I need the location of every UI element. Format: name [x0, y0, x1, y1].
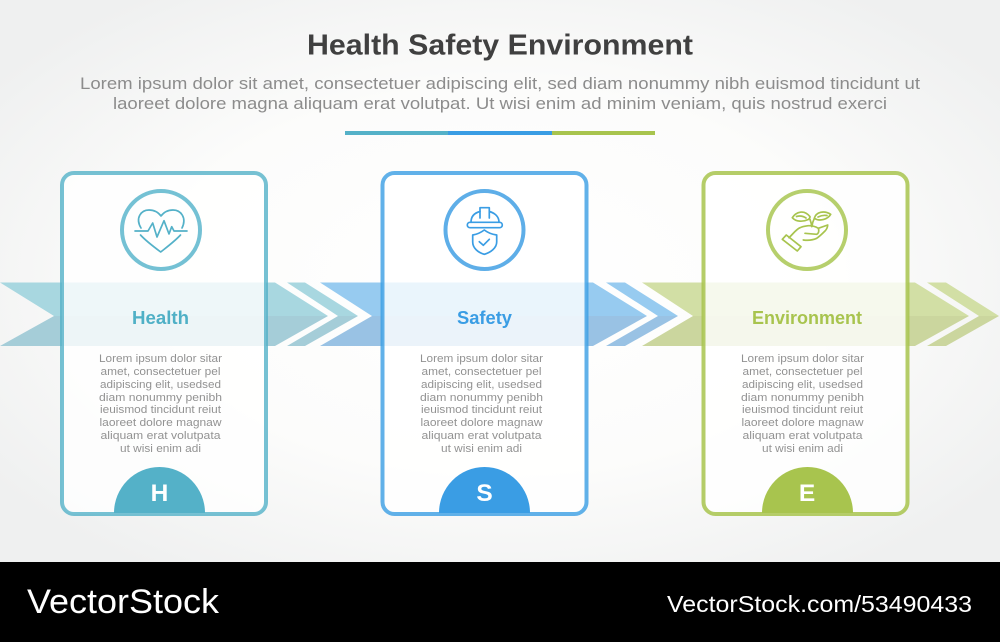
body text: ieuismod tincidunt reiut: [742, 404, 863, 416]
icon: hard hat and shield: [446, 191, 524, 269]
intro text: laoreet dolore magna aliquam erat volutpat. Ut wisi enim ad minim veniam, quis nostrud exerci: [113, 94, 887, 113]
arrow: health: [0, 282, 358, 346]
body text: aliquam erat volutpata: [422, 430, 542, 442]
footer bar: [0, 562, 1000, 642]
body text: ieuismod tincidunt reiut: [421, 404, 542, 416]
body text: Lorem ipsum dolor sitar: [741, 353, 864, 365]
card frame: [62, 173, 266, 514]
panel: safety: [382, 173, 586, 514]
panel: health: [62, 173, 266, 514]
body text: aliquam erat volutpata: [100, 430, 221, 442]
body text: diam nonummy penibh: [99, 392, 222, 404]
icon: hand holding seedling: [768, 191, 846, 269]
heading: Environment: [752, 308, 862, 328]
body text: aliquam erat volutpata: [742, 430, 863, 442]
body text: laoreet dolore magnaw: [420, 417, 543, 429]
tri-colour divider: [345, 131, 655, 135]
body text: diam nonummy penibh: [741, 392, 864, 404]
body text: [99, 353, 222, 455]
body text: ut wisi enim adi: [762, 443, 843, 455]
icon: heart with pulse: [122, 191, 200, 269]
heading: Safety: [457, 308, 512, 328]
body text: diam nonummy penibh: [420, 392, 543, 404]
letter badge: E: [762, 467, 853, 513]
body text: adipiscing elit, usedsed: [421, 379, 542, 391]
card frame: [704, 173, 908, 514]
body text: amet, consectetuer pel: [100, 366, 220, 378]
body text: Lorem ipsum dolor sitar: [420, 353, 543, 365]
body text: laoreet dolore magnaw: [742, 417, 864, 429]
body text: [420, 353, 543, 455]
body text: amet, consectetuer pel: [422, 366, 542, 378]
body text: ut wisi enim adi: [120, 443, 201, 455]
body text: [741, 353, 864, 455]
body text: Lorem ipsum dolor sitar: [99, 353, 222, 365]
title: Health Safety Environment: [307, 30, 693, 62]
panel: environment: [704, 173, 908, 514]
intro text: [80, 74, 920, 113]
footer logo: VectorStock: [27, 583, 220, 621]
card frame: [382, 173, 586, 514]
body text: laoreet dolore magnaw: [100, 417, 222, 429]
arrow band: [0, 282, 999, 346]
letter badge: H: H: [151, 480, 168, 507]
body text: adipiscing elit, usedsed: [100, 379, 221, 391]
letter badge: E: E: [799, 480, 815, 507]
body text: amet, consectetuer pel: [742, 366, 862, 378]
body text: adipiscing elit, usedsed: [742, 379, 863, 391]
letter badge: H: [114, 467, 205, 513]
letter badge: S: [439, 467, 530, 513]
arrow: safety: [320, 282, 678, 346]
body text: ieuismod tincidunt reiut: [100, 404, 221, 416]
heading: Health: [132, 308, 189, 328]
body text: ut wisi enim adi: [441, 443, 522, 455]
arrow: environment: [642, 282, 999, 346]
intro text: Lorem ipsum dolor sit amet, consectetuer adipiscing elit, sed diam nonummy nibh euismod tincidunt ut: [80, 74, 920, 93]
letter badge: S: S: [476, 480, 493, 507]
footer url: VectorStock.com/53490433: [667, 591, 972, 617]
